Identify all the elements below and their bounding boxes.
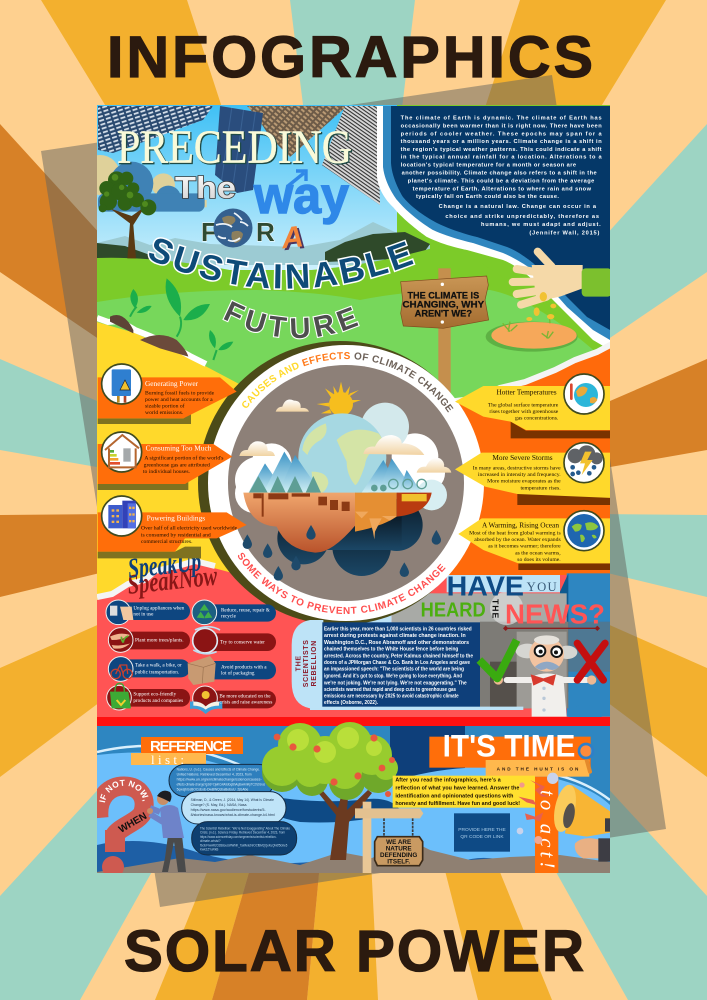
callout: powering buildings: Powering Buildings [147,514,205,523]
heading: have you: YOU [527,580,557,594]
heading: a: A [279,220,305,255]
text: scientists rebellion article: emissions are necessary by 2025 to avoid catastrophic climate [324,694,459,700]
text: action labels: Try to conserve water [220,639,265,645]
illustration: person pushing [147,791,186,872]
heading: future: FUTURE [222,300,360,340]
callout: consuming too much: greenhouse gas are attributed [144,462,210,468]
callout: more severe storms: More moisture evaporates as the [487,479,561,485]
reference 1: 5qwsjbGsBOCsEoE-DwBWQcbaBoEuU_2jGAbe [177,786,249,791]
panel: bottom blue waves [97,726,610,873]
heading: causes and effects of climate change: CAUSES AND EFFECTS OF CLIMATE CHANGE [242,352,454,412]
illustration: apple tree [262,722,398,860]
reference 2 [182,792,286,824]
ground [97,248,594,398]
heading: a [282,226,304,250]
icon: eco bag [107,683,131,710]
icon: package [188,656,216,685]
callout: more severe storms [455,443,612,505]
reference 2: 8/stories/nasa-knows/what-is-climate-change-k4.html [191,812,275,817]
text block: instructions: reflection of what you have learned. Answer the [395,785,519,791]
subheading: hunt is on: AND THE HUNT IS ON [497,766,579,771]
heading: sustainable: SUSTAINABLE [148,237,416,290]
callout: warming rising ocean: absorbed by the ocean. Water expands [474,537,561,543]
qr code placeholder: PROVIDE HERE THE [458,827,506,833]
callout: warming rising ocean: so does its volume. [517,557,561,563]
heading: the: THE [491,599,501,619]
text: action labels: lot of packaging [221,670,255,677]
callout: more severe storms: increased in intensity and frequency. [478,471,561,478]
heading: preceding: PRECEDING [118,122,353,175]
reference 3: https://www.sciencefriday.com/segments/scientist-rebellion- [200,835,277,839]
text: scientists rebellion article: an impassioned speech: "The scientists of the world are being [324,667,464,673]
panel: right orange area [440,344,612,575]
icon: book and bulb [190,686,222,714]
text: action labels: Reduce, reuse, repair & [221,608,270,614]
callout: generating power: power and heat accounts for a [145,396,213,403]
reference 1: https://www.un.org/en/climatechange/science/causes- [177,777,262,782]
illustration: tree [99,171,156,258]
text block: climate of earth: another possibility. Climate change also refers to a shift in the [402,171,597,177]
text block: climate of earth: periods of cooler weather. These epochs may span for a [401,131,603,137]
text: action labels: not in use [133,611,154,617]
heading: reference list: REFERENCE [150,738,232,755]
text: action labels [133,605,272,706]
reference 1: Nations, U. (n.d.). Causes and Effects of Climate Change. [177,767,260,772]
text: scientists rebellion article: Earlier this year, more than 1,000 scientists in 26 countries risked [324,626,472,632]
heading: news: NEWS? [505,598,605,629]
callout: warming rising ocean: A Warming, Rising Ocean [482,520,559,529]
qr code placeholder [454,813,510,852]
heading: heard: HEARD [421,600,486,622]
text block: instructions [393,776,535,808]
title: solar power: SOLAR POWER [124,919,586,984]
text: scientists rebellion article: doors of a JPMorgan Chase & Co. Bank in Los Angeles and gave [324,660,470,666]
text: scientists rebellion article: ignored. And it's got to stop. We're going to lose everything. And [324,673,462,679]
text: action labels: recycle [221,614,237,620]
icon: magnifying glass [579,744,593,772]
text: scientists rebellion article: arrest during protests against climate change inaction. In [324,633,466,639]
sign: the climate is changing: THE CLIMATE IS [407,291,479,301]
text block: climate of earth: in the typical annual rainfall for a location. Alterations to a [401,155,603,161]
sign: the climate is changing: CHANGING, WHY [402,300,485,310]
icon: red cross [577,643,605,680]
text block: instructions: honesty and fulfillment. Have fun and good luck! [395,801,520,807]
heading: for with earth: R [256,217,275,247]
callout: more severe storms: More Severe Storms [492,453,553,462]
text: scientists rebellion article: effects (Osborne, 2022). [324,700,379,706]
callout: consuming too much [98,432,232,490]
panel: have you heard the news [292,571,605,717]
sign: we are nature defending itself: WE ARE [386,839,411,846]
panel: it's time activity [393,729,612,873]
text: scientists rebellion article [322,622,480,707]
red divider band [97,717,610,726]
callout: generating power [98,364,237,424]
reference 3: climate-crisis/? [200,839,221,843]
icon: unplug [106,600,133,625]
panel: climate text band [377,106,610,350]
text: scientists rebellion article: Washington D.C., Rose Abramoff and other demonstrators [324,640,469,646]
text block: climate of earth: The climate of Earth is dynamic. The climate of Earth has [401,115,602,121]
heading: have you [447,571,557,602]
text: the scientists rebellion: REBELLION [311,640,318,687]
sign: we are nature defending itself: NATURE [386,845,412,852]
callout: hotter temperatures: rises together with greenhouse [489,409,559,415]
sign: we are nature defending itself: DEFENDING [380,852,417,859]
panel: causes and effects circle [198,341,484,622]
heading: have you: HAVE [447,571,524,602]
reference 1: United Nations. Retrieved December 4, 2023, from [177,772,252,777]
icon: question mark if not now when [97,776,154,873]
callout: consuming too much: A significant portion of the world's [144,455,223,462]
callout: powering buildings: commercial structures. [141,539,193,545]
text: scientists rebellion article: scientists warned that rapid and deep cuts to greenhouse gas [324,687,456,693]
text block: climate of earth: thousand years or a million years. Climate change is a shift in [401,139,602,145]
panel: speak up speak now heading [128,558,217,599]
heading: preceding: PRECEDING [117,121,352,174]
callout: hotter temperatures: gas concentrations. [515,416,559,422]
callout: consuming too much: Consuming Too Much [146,444,212,453]
text: action labels: public transportation. [135,669,179,675]
reference 3 [192,822,297,855]
text: action labels: products and companies [133,698,183,704]
heading: a: A [281,222,307,257]
panel: ways to prevent climate change [106,600,276,714]
callout: powering buildings: is consumed by residential and [141,532,211,538]
panel: effects on the right [455,374,612,570]
text: action labels: Take a walk, a bike, or [135,663,182,669]
text: scientists rebellion article: arrested. Across the country, Peter Kalmus chained himself to the [324,653,473,659]
text: scientists rebellion article: we're not joking. We're not lying. We're not exaggerating." The [323,680,467,686]
title: infographics: INFOGRAPHICS [107,25,596,90]
decorative zigzags and dots [517,773,558,844]
text: action labels: Plant more trees/plants. [135,638,184,644]
reference 2: Stillman, D., & Green, J. (2014, May 14). What Is Climate [191,797,275,802]
subheading: hunt is on [486,760,589,777]
callout: warming rising ocean: Most of the heat from global warming is [469,530,561,537]
panel: news photo backdrop [310,573,610,717]
heading: it's time: IT'S TIME [443,729,575,764]
callout: warming rising ocean: as the ocean warms, [515,550,561,556]
icon: water [193,627,220,654]
illustration: professor [494,635,596,717]
tilted translucent backing panel [41,75,666,907]
reference 1 [169,764,274,797]
icon: green check [479,640,517,678]
reference 2: Change? (S. May, Ed.). NASA; Nasa. [191,802,247,807]
panel: sky and skyline [97,105,397,270]
illustration: clouds [97,155,207,212]
callout: hotter temperatures [455,374,612,438]
text block: instructions: After you read the infographics, here's a [395,778,501,784]
poster content [97,105,610,873]
panel: causes on the left [98,364,247,558]
heading: for with earth: F [201,217,217,247]
heading: for with earth [201,208,275,248]
callout: hotter temperatures: Hotter Temperatures [496,387,557,396]
sign: we are nature defending itself [355,802,423,875]
icon: question mark if not now when: IF NOT NOW, [99,780,148,802]
heading: way: way [253,167,349,225]
text: action labels: Be more educated on the [219,694,271,700]
icon: seedlings [110,278,233,360]
reference 3: fbclid=IwAR2O2B8ouUWWNK_TaWiekzNrOCfBMQQeKuQNdf5Ghe5 [200,843,287,847]
text: the scientists rebellion: THE [295,655,302,671]
heading: some ways to prevent climate change: SOME WAYS TO PREVENT CLIMATE CHANGE [238,552,446,614]
text: action labels: crisis and raise awareness [219,700,272,706]
text block: climate of earth: Change is a natural law. Change can occur in a [439,204,597,210]
text block: climate of earth: planet's climate. This could be a deviation from the average [408,178,594,184]
reference 3: The Scientist Rebellion: "We're Not Exaggerating" About The Climate [200,826,290,830]
sign: the climate is changing: AREN'T WE? [415,309,472,319]
callout: powering buildings [98,496,247,558]
icon: plant [108,628,133,652]
text block: climate of earth: temperature of Earth. Alterations to where rain and snow [413,186,592,192]
icon: bicycle [108,657,133,681]
text block: climate of earth: occasionally been warmer than it is right now. There have been [401,123,602,129]
text block: climate of earth: typically fall on Earth could also be the cause. [416,194,559,200]
sign: the climate is changing [400,268,489,394]
callout: generating power: Generating Power [145,379,199,388]
heading: the: The [175,170,236,205]
reference 3: Crisis. (n.d.). Science Friday. Retrieved December 4, 2023, from [200,831,285,835]
text: the scientists rebellion [292,620,323,708]
panel: left yellow area [97,315,238,600]
icon: megaphone [550,783,612,862]
callout: generating power: sizable portion of [145,403,185,410]
sign: we are nature defending itself: ITSELF. [387,858,410,865]
hills [97,222,430,268]
heading: reference list [131,737,243,767]
callout: more severe storms: temperature rises. [520,485,561,491]
text block: climate of earth: the region's typical weather patterns. This could indicate a shift [401,147,602,153]
text block: climate of earth: location's typical temperature for a month or season are [401,163,576,169]
text block: climate of earth [401,115,603,236]
text: scientists rebellion article: chained themselves to the White House fence before being [324,647,458,653]
text: action labels: Unplug appliances when [133,605,185,611]
icon: recycle [192,600,217,625]
callout: powering buildings: Over half of all electricity used worldwide [141,525,238,532]
heading: preceding [118,131,352,165]
illustration: hand dropping seeds on mound [486,252,612,352]
reference 3: Kwk2ZYuRkB [200,848,219,852]
text block: instructions: identification and opinionated questions with [395,794,513,800]
text block: climate of earth: (Jennifer Wall, 2015) [529,230,599,236]
panel: speak up speak now heading: SpeakNow [126,561,219,601]
panel: speak up speak now heading: SpeakUp [126,546,203,585]
callout: more severe storms: In many areas, destructive storms have [473,465,561,471]
reference 1: effects-climate-change?gclid=CjwKCAiA9dGqBhAqEiwAmRpTC2h2Grus [177,782,265,787]
to act vertical banner: to act! [536,790,558,868]
panel: red prevention area [97,561,610,720]
qr code placeholder: QR CODE OR LINK [460,834,504,840]
callout: warming rising ocean: as it becomes warmer; therefore [488,543,561,550]
icon: question mark if not now when: WHEN [117,811,149,836]
callout: generating power: Burning fossil fuels to provide [145,389,215,396]
text block: climate of earth: humans, we must adapt and adjust. [481,222,601,228]
callout: consuming too much: to individual houses. [143,469,191,475]
callout: warming rising ocean [458,511,612,570]
illustration: earth with land and sky [235,382,451,581]
text: action labels: Avoid products with a [221,665,267,671]
heading: reference list: list: [151,752,184,767]
callout: hotter temperatures: The global surface temperature [488,401,559,408]
text block: climate of earth: choice and strike unpredictably, therefore as [445,214,599,220]
references list [169,764,297,855]
callout: generating power: world emissions. [145,410,184,416]
text: the scientists rebellion: SCIENTISTS [303,639,310,687]
reference 2: https://www.nasa.gov/audience/forstudents/5- [191,807,266,812]
text: action labels: Support eco-friendly [133,691,177,698]
